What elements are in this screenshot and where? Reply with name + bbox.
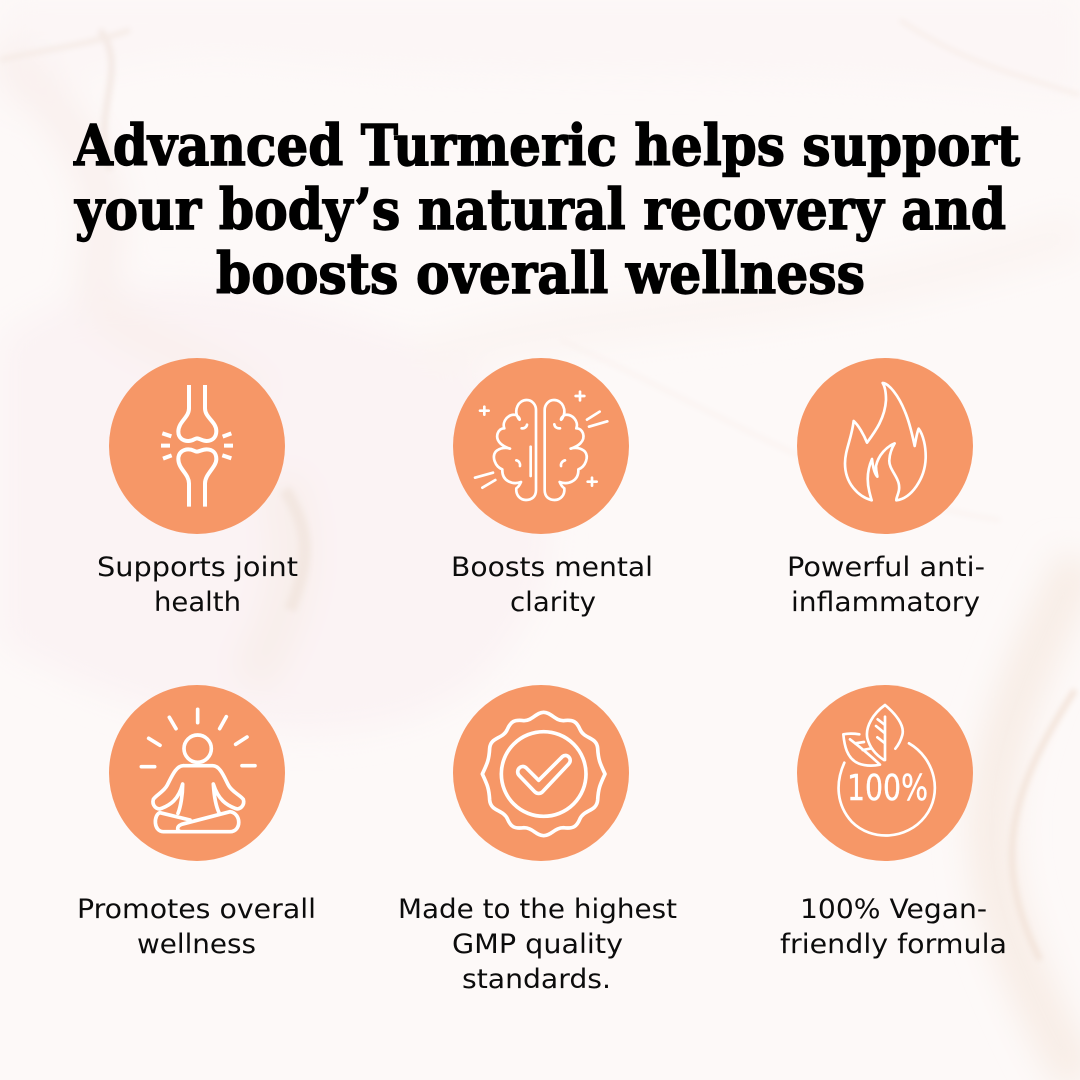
label: vegan-friendly: friendly formula (780, 929, 1007, 960)
panel: GMP quality (398, 685, 677, 995)
panel: vegan-friendly (780, 685, 1007, 960)
icon: brain (453, 358, 629, 534)
title: your body’s natural recovery and (74, 177, 1006, 243)
label: overall wellness: Promotes overall (77, 894, 316, 925)
label: mental clarity: clarity (510, 587, 596, 618)
title: boosts overall wellness (216, 241, 865, 307)
label: overall wellness: wellness (137, 929, 256, 960)
label: GMP quality: standards. (462, 964, 611, 995)
icon: quality badge with check (453, 685, 629, 861)
icon: flame (797, 358, 973, 534)
panel: mental clarity (451, 358, 653, 618)
label: anti-inflammatory: Powerful anti- (787, 552, 985, 583)
label: vegan-friendly: 100% Vegan- (800, 894, 987, 925)
label: joint health: health (154, 587, 241, 618)
label: joint health: Supports joint (97, 552, 298, 583)
title (73, 113, 1020, 307)
label: anti-inflammatory: inflammatory (791, 587, 980, 618)
icon: knee joint (109, 358, 285, 534)
label: mental clarity: Boosts mental (451, 552, 653, 583)
label: GMP quality: Made to the highest (398, 894, 677, 925)
panel: joint health (97, 358, 298, 618)
icon: leaves with 100 percent (797, 685, 973, 861)
panel: overall wellness (77, 685, 316, 960)
label: GMP quality: GMP quality (452, 929, 623, 960)
icon: meditating figure (109, 685, 285, 861)
panel: anti-inflammatory (787, 358, 985, 618)
icon text: 100%: 100% (847, 768, 928, 809)
